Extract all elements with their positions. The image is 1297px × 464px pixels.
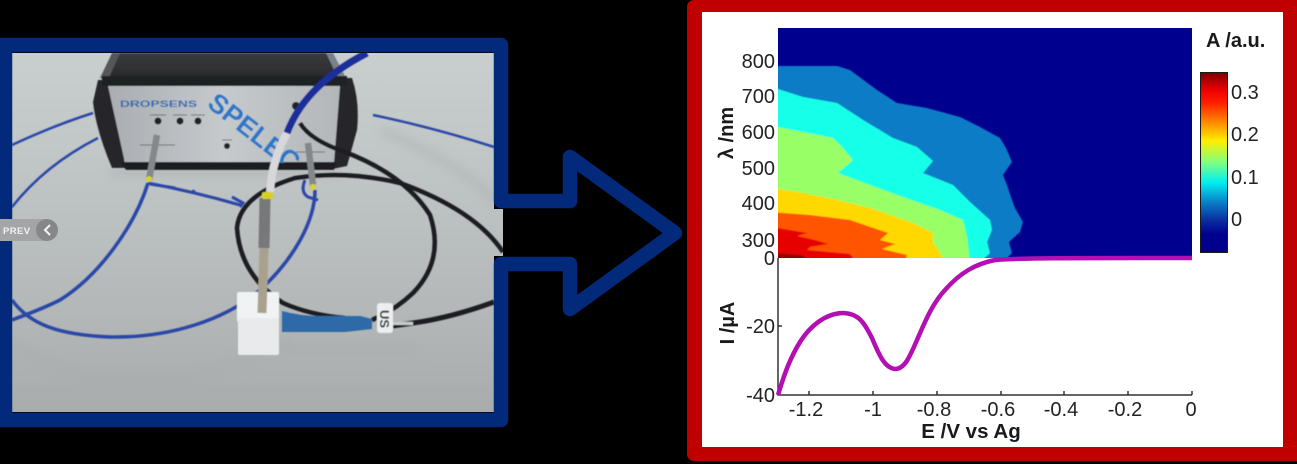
voltage axis tick labels: -1 xyxy=(864,399,882,421)
wavelength axis tick labels: 700 xyxy=(742,86,775,108)
current axis tick labels xyxy=(746,316,775,407)
voltammogram curve xyxy=(778,258,1192,395)
voltage axis tick labels: -1.2 xyxy=(789,399,823,421)
panel: result plot frame xyxy=(687,0,1297,461)
voltage axis title: E /V vs Ag xyxy=(921,420,1021,443)
prev button circle xyxy=(36,219,58,241)
wavelength axis tick labels: 600 xyxy=(742,122,775,144)
colour bar labels xyxy=(1231,82,1259,231)
thin blue fibre cables xyxy=(12,113,494,337)
instrument box xyxy=(93,53,358,177)
contour level cyan xyxy=(770,87,992,262)
voltage axis tick labels: 0 xyxy=(1185,399,1197,421)
colour bar labels: 0.2 xyxy=(1231,124,1259,146)
instrument name: SPELEC xyxy=(202,87,306,177)
colour bar xyxy=(1200,72,1259,252)
current axis tick labels: -20 xyxy=(746,316,775,338)
cable label tag: US xyxy=(377,310,392,328)
shadows on the bench xyxy=(113,138,428,182)
prev button overlay: PREV xyxy=(3,226,31,237)
black cables xyxy=(237,123,503,326)
left probe xyxy=(146,135,157,182)
colour bar labels: 0.1 xyxy=(1231,167,1259,189)
voltage axis tick labels: -0.4 xyxy=(1044,399,1078,421)
colour bar labels: 0.3 xyxy=(1231,82,1259,104)
prev button overlay xyxy=(0,219,58,241)
contour level red xyxy=(778,228,854,258)
contour level yellow xyxy=(770,188,943,262)
voltage axis tick labels: -0.8 xyxy=(917,399,951,421)
wavelength axis tick labels: 0 xyxy=(764,248,775,270)
contour plot xyxy=(770,28,1192,262)
cable label tag xyxy=(377,303,413,333)
wavelength axis title: λ /nm xyxy=(716,107,738,159)
connectors xyxy=(154,102,300,149)
white probe block xyxy=(237,292,279,355)
contour level dark red xyxy=(778,253,808,258)
voltage axis tick labels: -0.6 xyxy=(981,399,1015,421)
wavelength axis tick labels: 400 xyxy=(742,193,775,215)
brand label: DROPSENS xyxy=(120,99,197,110)
blue handle of the electrode xyxy=(282,311,372,332)
panel: photograph of the instrument setup xyxy=(12,53,503,412)
voltage axis tick labels xyxy=(789,399,1197,421)
voltage axis tick labels: -0.2 xyxy=(1108,399,1142,421)
current axis tick labels: -40 xyxy=(746,385,775,407)
contour level green xyxy=(770,126,970,262)
current axis title: I /µA xyxy=(717,302,739,344)
contour level blue xyxy=(770,66,1023,262)
colour bar title: A /a.u. xyxy=(1206,30,1265,52)
arrow and frame outline xyxy=(0,45,675,420)
wavelength axis tick labels: 800 xyxy=(742,51,775,73)
centre probe xyxy=(262,133,287,313)
current axis and voltage axis xyxy=(778,258,1192,395)
contour level orange xyxy=(778,212,908,258)
wavelength axis tick labels xyxy=(742,51,775,270)
thick blue fibre xyxy=(287,53,367,133)
wavelength axis tick labels: 500 xyxy=(742,158,775,180)
right probe xyxy=(308,143,316,190)
colour bar labels: 0 xyxy=(1231,209,1242,231)
wavelength axis tick labels: 300 xyxy=(742,230,775,252)
